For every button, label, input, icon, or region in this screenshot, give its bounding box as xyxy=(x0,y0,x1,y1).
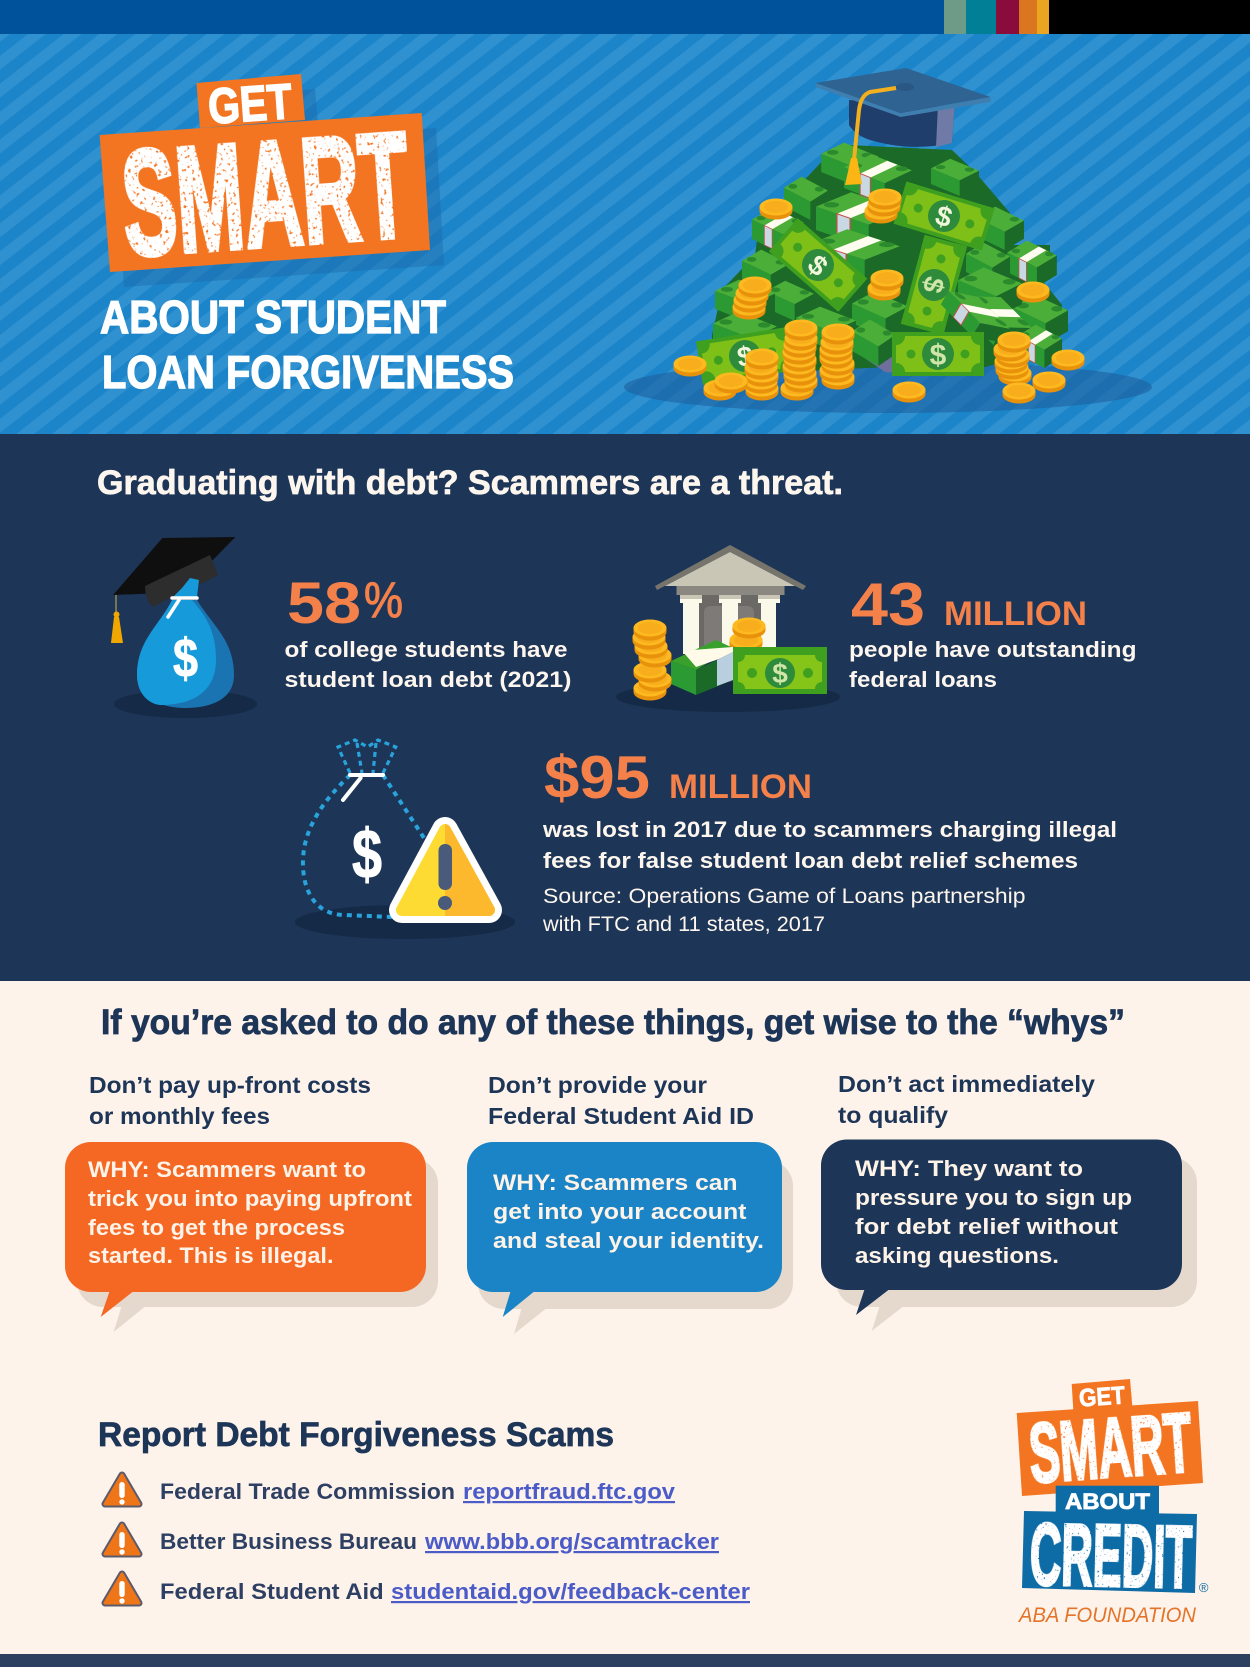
bubble: blue xyxy=(467,1142,793,1334)
stat: $95 million: $95 xyxy=(544,744,650,811)
title xyxy=(100,291,514,398)
bubble: blue: WHY: Scammers can xyxy=(493,1170,738,1195)
bubble: navy: WHY: They want to xyxy=(855,1156,1083,1181)
bill: front left xyxy=(690,321,800,391)
column 3 heading xyxy=(838,1071,1095,1128)
title: ABOUT STUDENT xyxy=(100,291,446,343)
bill: front centre: $ xyxy=(930,339,947,372)
stat: $95 million: fees for false student loan debt relief schemes xyxy=(543,848,1078,873)
bill: upper right: $ xyxy=(932,199,956,234)
stat: 58%: of college students have xyxy=(284,637,568,662)
bubble: blue: get into your account xyxy=(493,1199,747,1224)
logo: get smart about credit xyxy=(1017,1379,1209,1627)
logo: get smart: GET xyxy=(206,73,294,135)
logo: get smart about credit: ABA FOUNDATION xyxy=(1017,1604,1197,1627)
stat: 43 million: MILLION xyxy=(944,595,1087,633)
panel: cream section xyxy=(0,981,1250,1652)
stat: $95 million: Source: Operations Game of Loans partnership xyxy=(543,885,1026,908)
bill: tilted left xyxy=(762,211,874,319)
report row: FTC: Federal Trade Commission xyxy=(160,1479,455,1504)
bubble: orange: trick you into paying upfront xyxy=(88,1186,413,1211)
bubble: navy xyxy=(821,1140,1197,1331)
report row: FSA: Federal Student Aid xyxy=(160,1579,384,1604)
bill: front centre xyxy=(887,327,989,381)
bubble: navy: for debt relief without xyxy=(855,1214,1119,1239)
report row: BBB xyxy=(105,1525,719,1555)
logo: get smart about credit: ABOUT xyxy=(1065,1489,1151,1514)
bill: tilted left: $ xyxy=(802,249,834,282)
bubble: orange: started. This is illegal. xyxy=(88,1243,334,1268)
stat: $95 million: with FTC and 11 states, 2017 xyxy=(542,913,825,936)
stat: 58% xyxy=(284,571,572,692)
stat: $95 million xyxy=(542,744,1117,936)
bubble: navy: pressure you to sign up xyxy=(855,1185,1132,1210)
panel: dark statistics xyxy=(0,434,1250,981)
bill: vertical centre: $ xyxy=(916,273,951,297)
bubble: orange: fees to get the process xyxy=(88,1215,345,1240)
column 2 heading: Don’t provide your xyxy=(488,1072,707,1098)
report row: FSA xyxy=(105,1574,750,1604)
stat: 43 million xyxy=(849,571,1136,692)
stat: 58%: % xyxy=(364,572,403,628)
icon: money bag with cap: $ xyxy=(173,627,198,689)
stat: $95 million: MILLION xyxy=(669,768,812,806)
bubble: orange: WHY: Scammers want to xyxy=(88,1157,366,1182)
logo: get smart about credit: GET xyxy=(1078,1381,1126,1413)
bill: upper right xyxy=(887,175,1001,257)
top colour bar xyxy=(0,0,1250,34)
heading: Graduating with debt? Scammers are a threat. xyxy=(97,464,843,502)
report row: BBB: www.bbb.org/scamtracker xyxy=(424,1529,719,1554)
footer bar xyxy=(0,1654,1250,1667)
logo: get smart about credit: ® xyxy=(1199,1580,1209,1595)
title: LOAN FORGIVENESS xyxy=(102,346,514,398)
icon: money bag with cap xyxy=(111,537,257,718)
heading: whys: If you’re asked to do any of these things, get wise to the “whys” xyxy=(101,1003,1125,1042)
icon: bank with money xyxy=(616,545,840,712)
column 1 heading xyxy=(89,1072,371,1129)
column 3 heading: to qualify xyxy=(838,1102,948,1128)
report row: FSA: studentaid.gov/feedback-center xyxy=(391,1579,750,1604)
bubble: orange xyxy=(65,1142,438,1332)
column 3 heading: Don’t act immediately xyxy=(838,1071,1095,1097)
stat: 58%: 58 xyxy=(287,571,361,636)
coins xyxy=(674,188,1084,404)
report row: FTC: reportfraud.ftc.gov xyxy=(463,1479,676,1504)
bill: front left: $ xyxy=(735,340,756,373)
heading: report scams: Report Debt Forgiveness Scams xyxy=(98,1416,614,1454)
column 2 heading: Federal Student Aid ID xyxy=(488,1103,754,1129)
icon: bank with money: $ xyxy=(772,658,788,689)
report row: BBB: Better Business Bureau xyxy=(160,1529,417,1554)
icon: dashed money bag with warning xyxy=(295,740,515,939)
bubble: navy: asking questions. xyxy=(855,1243,1059,1268)
panel: hero xyxy=(0,34,1250,434)
column 1 heading: or monthly fees xyxy=(89,1103,270,1129)
column 2 heading xyxy=(488,1072,754,1129)
report row: FTC xyxy=(105,1475,676,1505)
bill: vertical centre xyxy=(895,229,973,341)
stat: $95 million: was lost in 2017 due to scammers charging illegal xyxy=(542,817,1117,842)
bubble: blue: and steal your identity. xyxy=(493,1228,764,1253)
illustration: money pile with graduation cap xyxy=(624,68,1152,413)
logo: get smart: SMART xyxy=(117,100,415,288)
stat: 43 million: people have outstanding xyxy=(849,637,1136,662)
graduation cap xyxy=(816,68,990,185)
icon: dashed money bag with warning: $ xyxy=(352,815,382,893)
stat: 43 million: federal loans xyxy=(849,667,997,692)
stat: 43 million: 43 xyxy=(851,571,925,638)
logo: get smart xyxy=(100,73,444,288)
column 1 heading: Don’t pay up-front costs xyxy=(89,1072,371,1098)
stat: 58%: student loan debt (2021) xyxy=(284,667,572,692)
